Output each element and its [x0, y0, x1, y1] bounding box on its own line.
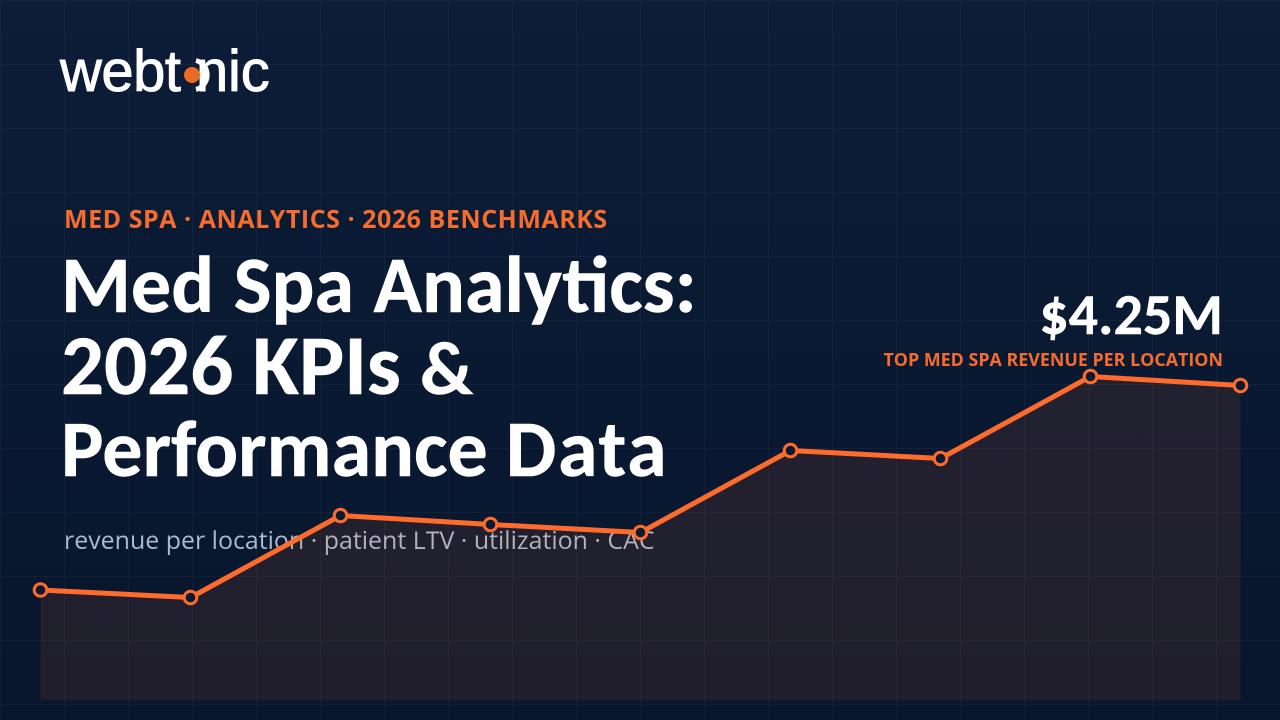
eyebrow: MED SPA · ANALYTICS · 2026 BENCHMARKS	[64, 202, 608, 236]
subtitle: revenue per location · patient LTV · utilization · CAC	[64, 523, 655, 557]
logo: webtonic: webt	[60, 39, 181, 104]
logo: webtonic: nic	[196, 39, 270, 104]
title: Med Spa Analytics:	[61, 237, 697, 334]
callout value: $4.25M	[1039, 279, 1223, 350]
chart line	[40, 376, 1240, 598]
title: Performance Data	[61, 401, 668, 498]
callout caption: TOP MED SPA REVENUE PER LOCATION	[883, 348, 1223, 372]
title	[61, 237, 697, 498]
title: 2026 KPIs &	[61, 313, 473, 417]
chart area fill	[40, 376, 1240, 700]
logo: webtonic	[59, 39, 270, 104]
chart data points	[34, 370, 1247, 604]
